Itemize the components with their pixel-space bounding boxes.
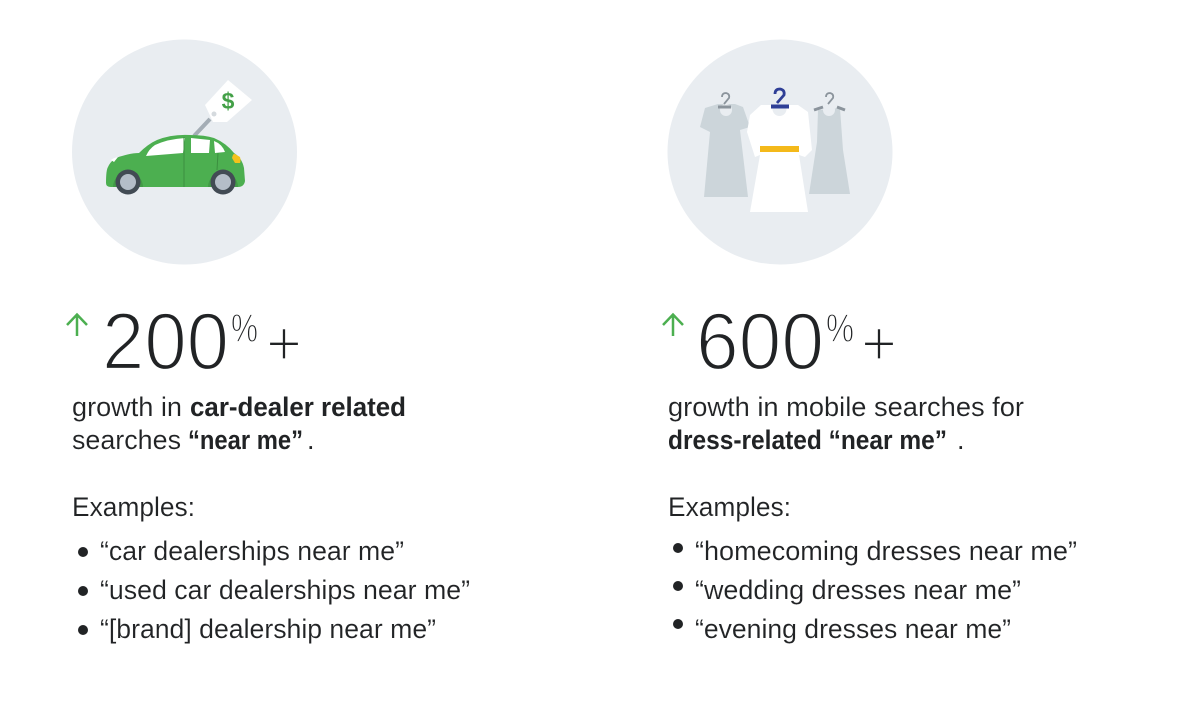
icon: car with price tag: $ (222, 88, 235, 114)
list: examples: “[brand] dealership near me” (100, 614, 436, 644)
icon: up arrow (67, 314, 87, 336)
stat: 600% +: + (861, 307, 897, 379)
text: examples heading: Examples: (668, 492, 791, 522)
icon: up arrow (663, 314, 683, 336)
icon: three dresses on hangers (668, 40, 892, 264)
text: description: “near me” (188, 425, 303, 455)
stat: 600% + (696, 297, 897, 387)
text: examples heading: Examples: (72, 492, 195, 522)
text: description (72, 392, 406, 455)
text: description: car-dealer related (190, 392, 406, 422)
list: examples (673, 536, 1077, 644)
text: description (668, 392, 1024, 455)
text: description: searches (72, 425, 181, 455)
stat: 200% + (102, 297, 302, 387)
list: examples: “evening dresses near me” (695, 614, 1011, 644)
stat: 600% +: % (826, 307, 854, 351)
text: description: growth in mobile searches for (668, 392, 1024, 422)
text: description: dress-related “near me” (668, 425, 947, 455)
panel: dress searches (663, 40, 1077, 644)
text: description: . (957, 425, 965, 455)
text: description: . (307, 425, 315, 455)
stat: 600% +: 600 (696, 297, 824, 387)
stat: 200% +: + (266, 307, 302, 379)
list: examples: “homecoming dresses near me” (695, 536, 1077, 566)
list: examples: “used car dealerships near me” (100, 575, 470, 605)
icon: car with price tag (72, 40, 297, 264)
list: examples: “car dealerships near me” (100, 536, 404, 566)
text: description: growth in (72, 392, 182, 422)
panel: car dealer searches (67, 40, 470, 644)
stat: 200% +: % (231, 307, 258, 351)
stat: 200% +: 200 (102, 297, 229, 387)
list: examples (78, 536, 470, 644)
list: examples: “wedding dresses near me” (695, 575, 1021, 605)
